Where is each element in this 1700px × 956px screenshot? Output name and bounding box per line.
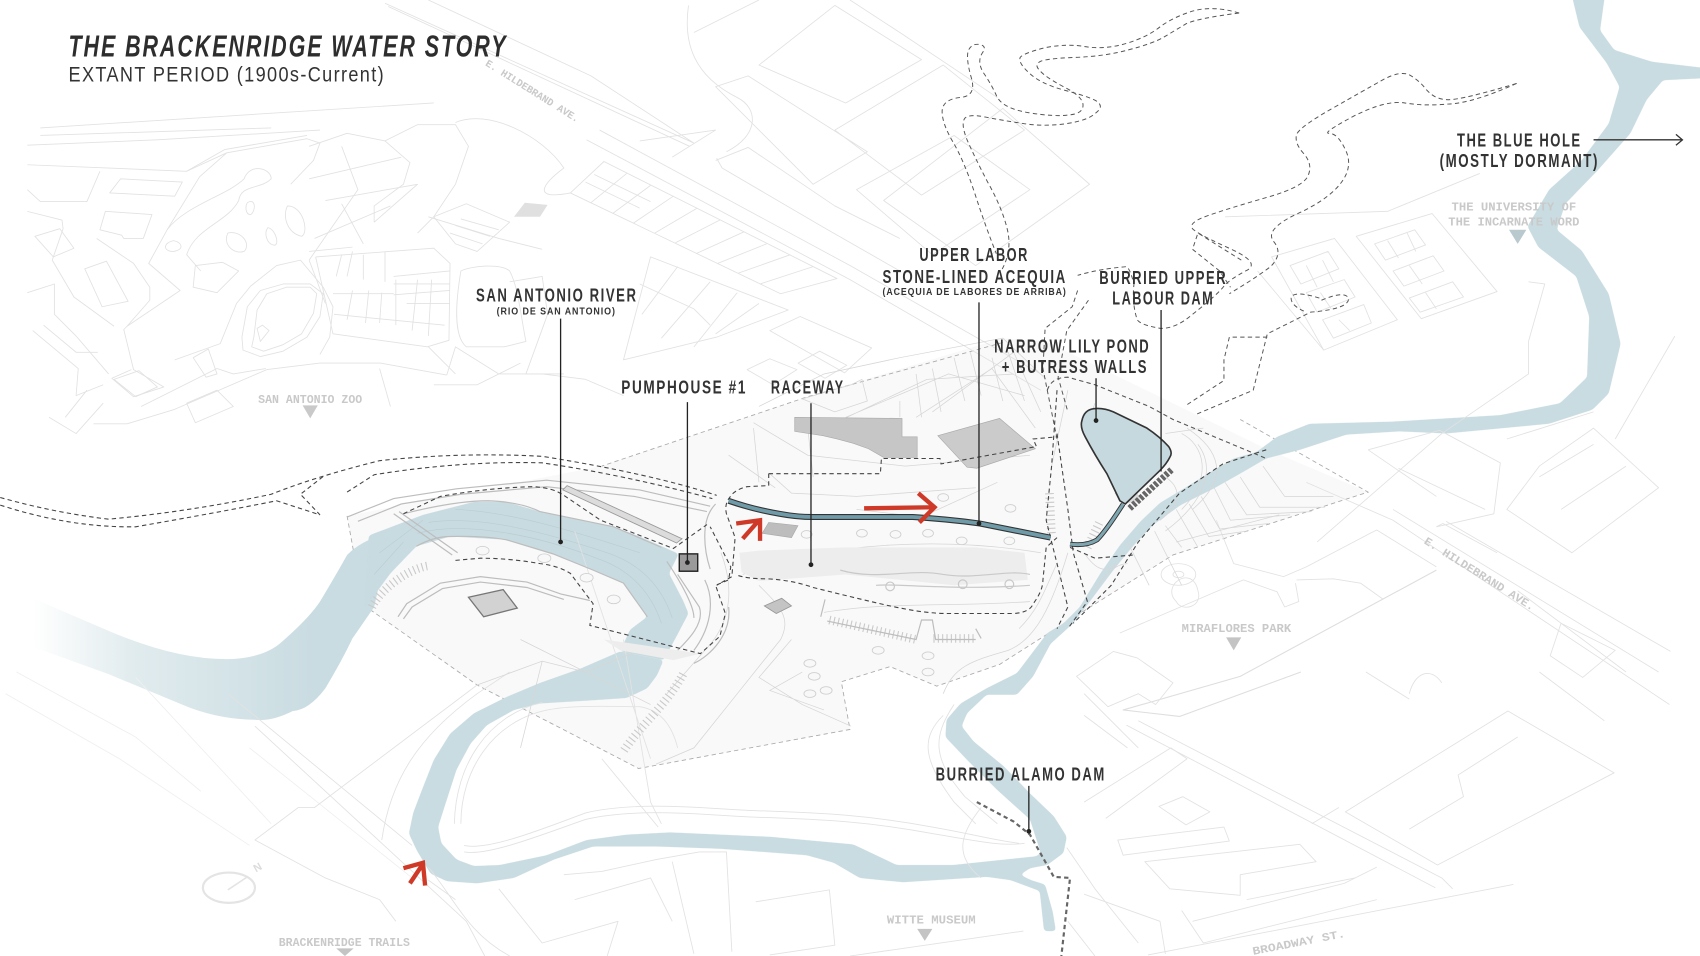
bridge xyxy=(604,640,700,660)
label: Pumphouse #1: PUMPHOUSE #1 xyxy=(621,376,747,397)
context labels and markers: MIRAFLORES PARK xyxy=(1182,622,1292,636)
context labels and markers: BRACKENRIDGE TRAILS xyxy=(279,936,410,950)
label: Burried Alamo Dam: BURRIED ALAMO DAM xyxy=(936,763,1106,784)
title: THE BRACKENRIDGE WATER STORY xyxy=(69,30,508,63)
site: contour lines and paths xyxy=(477,338,1333,764)
river channel xyxy=(409,0,1700,931)
label: Raceway: RACEWAY xyxy=(771,376,845,397)
San Antonio River upstream fade xyxy=(0,533,390,720)
grey buildings xyxy=(468,203,1140,617)
label: Burried Upper Labour Dam xyxy=(1099,267,1227,309)
label: Burried Upper Labour Dam: LABOUR DAM xyxy=(1112,288,1214,309)
label: San Antonio River: (RIO DE SAN ANTONIO) xyxy=(497,306,616,317)
pumphouse #1 box xyxy=(679,554,698,571)
historic acequia dashed traces xyxy=(942,9,1517,439)
lake contours xyxy=(374,417,1154,623)
context labels and markers: THE INCARNATE WORD xyxy=(1448,215,1579,229)
label: Upper Labor stone-lined acequia: (ACEQUIA DE LABORES DE ARRIBA) xyxy=(883,287,1067,298)
leader lines xyxy=(559,302,1161,833)
label: Upper Labor stone-lined acequia: STONE-LINED ACEQUIA xyxy=(883,266,1067,287)
burried Alamo dam dashed line xyxy=(977,802,1070,956)
street labels xyxy=(483,58,1536,956)
meadow paths xyxy=(840,570,1030,591)
arrow: toward the Blue Hole xyxy=(1594,134,1682,145)
trees xyxy=(476,494,1016,697)
label: Narrow Lily Pond and Butress Walls: NARROW LILY POND xyxy=(994,335,1150,356)
label: San Antonio River xyxy=(476,284,638,317)
site boundary area xyxy=(347,338,1368,768)
label: The Blue Hole xyxy=(1440,129,1599,171)
label: Narrow Lily Pond and Butress Walls xyxy=(994,335,1150,377)
label: San Antonio River: SAN ANTONIO RIVER xyxy=(476,284,638,305)
icon: north compass xyxy=(203,861,264,903)
subtitle: EXTANT PERIOD (1900s-Current) xyxy=(69,61,385,86)
context labels and markers: WITTE MUSEUM xyxy=(887,913,976,927)
icon: north compass: N xyxy=(252,861,264,875)
main dashed path lines xyxy=(0,377,1266,654)
meadow below raceway xyxy=(739,547,1028,585)
context labels and markers: SAN ANTONIO ZOO xyxy=(258,393,362,407)
red flow arrows xyxy=(403,493,935,886)
street labels: E. HILDEBRAND AVE. xyxy=(483,58,581,126)
label: The Blue Hole: (MOSTLY DORMANT) xyxy=(1440,150,1599,171)
label: The Blue Hole: THE BLUE HOLE xyxy=(1457,129,1582,150)
label: Upper Labor stone-lined acequia: UPPER LABOR xyxy=(919,244,1029,265)
lake: San Antonio River pool xyxy=(363,502,688,660)
parking stalls xyxy=(372,493,1100,751)
context labels and markers: THE UNIVERSITY OF xyxy=(1452,200,1576,214)
label: Narrow Lily Pond and Butress Walls: + BUTRESS WALLS xyxy=(1002,356,1148,377)
shoreline and promenade paths xyxy=(347,480,981,663)
street labels: E. HILDEBRAND AVE. xyxy=(1421,536,1536,614)
label: Upper Labor stone-lined acequia xyxy=(883,244,1067,298)
label: Burried Upper Labour Dam: BURRIED UPPER xyxy=(1099,267,1227,288)
narrow lily pond xyxy=(1081,408,1171,504)
context labels and markers xyxy=(258,200,1579,956)
buttress walls xyxy=(1130,469,1172,508)
faint far-field linework xyxy=(6,672,412,878)
upper labor stone-lined acequia xyxy=(729,501,1123,545)
